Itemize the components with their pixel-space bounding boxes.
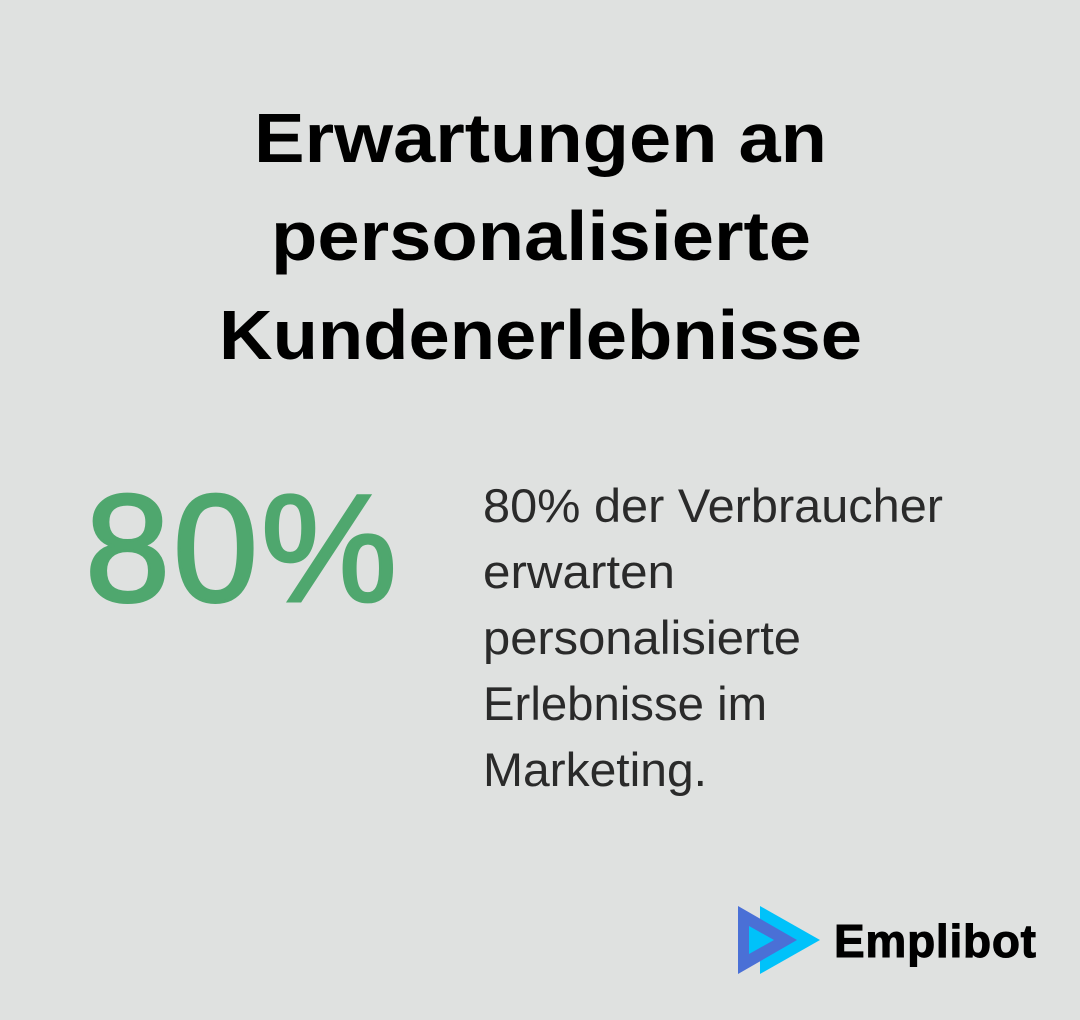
title: Erwartungen an [254,99,827,177]
logo: Emplibot [738,906,1036,974]
icon: play triangles [738,906,820,974]
title: personalisierte [271,197,811,275]
description text: Marketing. [483,743,707,796]
title [219,99,862,374]
description text: Erlebnisse im [483,677,767,730]
big statistic: 80%: 80% [85,463,397,634]
description text: 80% der Verbraucher [483,479,943,532]
description text: personalisierte [483,611,801,664]
description text [483,479,943,796]
logo wordmark: Emplibot [834,915,1036,967]
description text: erwarten [483,545,675,598]
title: Kundenerlebnisse [219,296,862,374]
